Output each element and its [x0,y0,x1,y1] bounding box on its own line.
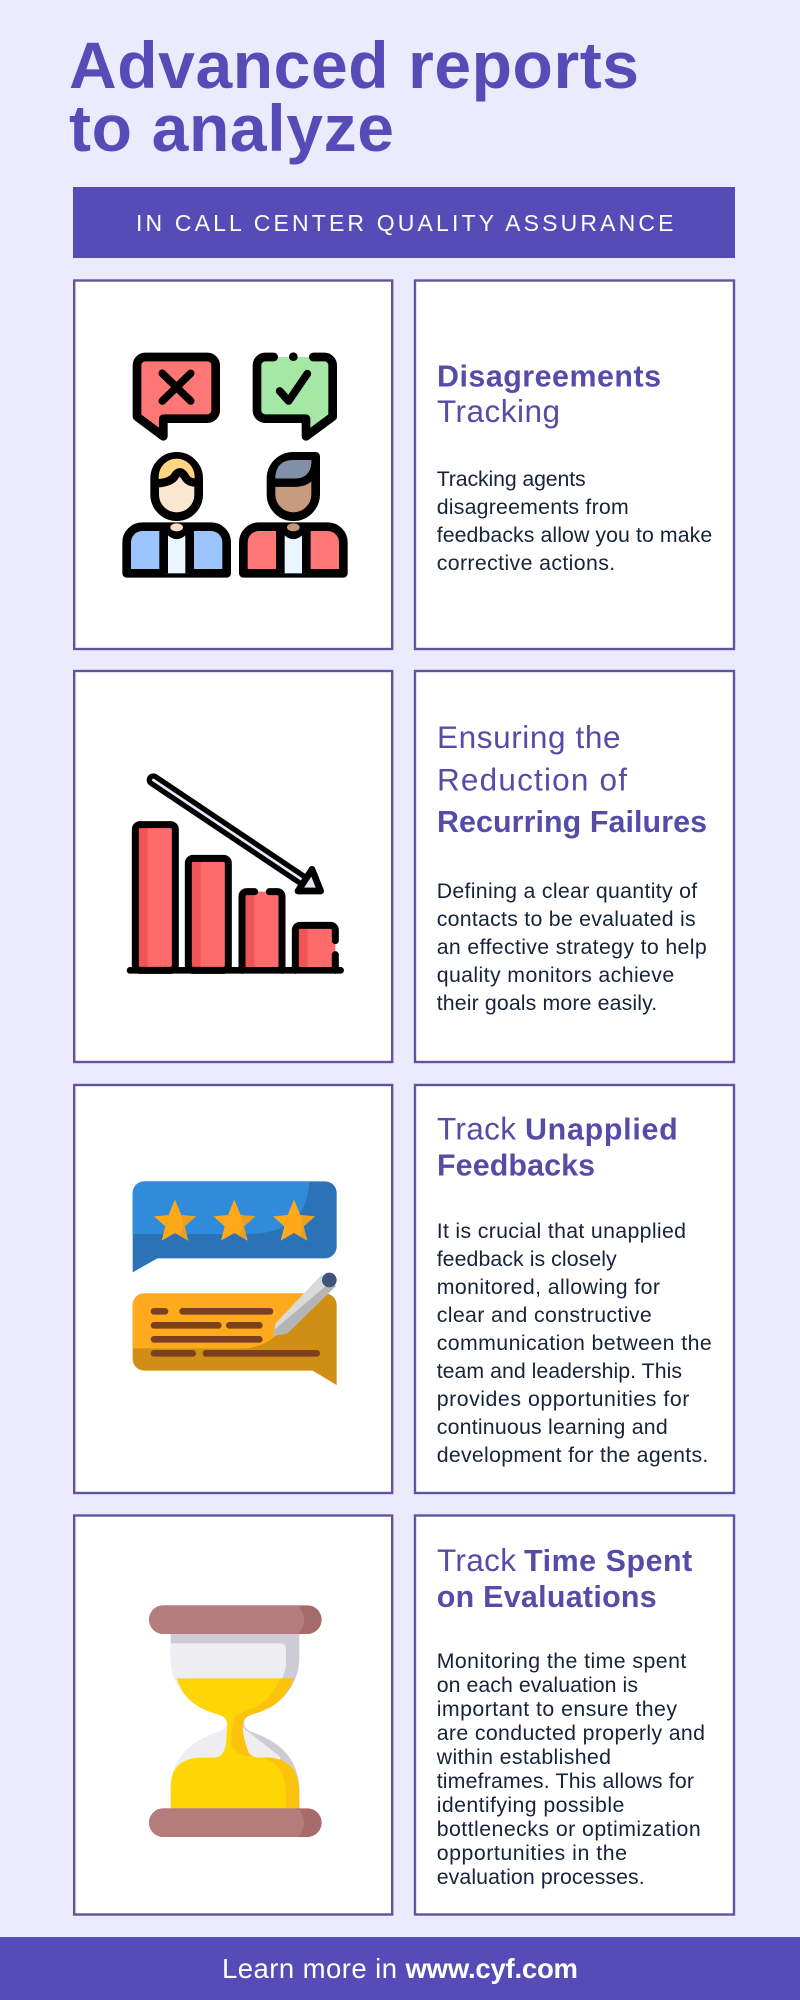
heading: Disagreements [437,360,661,394]
body text: feedback is closely [437,1247,617,1271]
panel: recurring failures text card [415,671,734,1062]
body text: feedbacks allow you to make [437,523,712,547]
body text: identifying possible [437,1793,624,1817]
body text: team and leadership. This [437,1359,682,1383]
heading: Ensuring the [437,719,620,755]
icon: hourglass [149,1605,322,1837]
body text: opportunities in the [437,1841,627,1865]
body text: quality monitors achieve [437,963,674,987]
body text: evaluation processes. [437,1865,645,1889]
footer bar [0,1937,800,2000]
body text: monitored, allowing for [437,1275,660,1299]
heading: Track [437,1542,516,1578]
footer bar: www.cyf.com [404,1953,578,1984]
body text: communication between the [437,1331,712,1355]
body text: bottlenecks or optimization [437,1817,701,1841]
body text: development for the agents. [437,1443,708,1467]
body text: an effective strategy to help [437,935,707,959]
heading: Reduction of [437,762,627,798]
body text: Monitoring the time spent [437,1649,686,1673]
body text: continuous learning and [437,1415,668,1439]
body text: are conducted properly and [437,1721,705,1745]
heading [437,1542,692,1614]
body text: important to ensure they [437,1697,677,1721]
title: to analyze [69,91,394,165]
panel: time spent text card [415,1516,734,1914]
right person [243,456,343,573]
body text: on each evaluation is [437,1673,638,1697]
body text: provides opportunities for [437,1387,689,1411]
footer bar: Learn more in [222,1953,397,1984]
panel: disagreements icon card [74,280,392,649]
subtitle banner [73,187,735,258]
body text: It is crucial that unapplied [437,1219,686,1243]
body text: Defining a clear quantity of [437,879,697,903]
heading: Track [437,1110,516,1146]
body text: their goals more easily. [437,991,657,1015]
heading: Recurring Failures [437,805,707,839]
panel: unapplied feedbacks icon card [74,1085,392,1493]
icon: two agents disagreeing [127,352,343,573]
body text [437,467,712,575]
heading [437,1110,678,1182]
heading: Unapplied [525,1112,678,1146]
heading [437,360,661,429]
heading: Time Spent [524,1544,692,1578]
body text: corrective actions. [437,551,615,575]
body text [436,1649,705,1889]
panel: disagreements text card [415,280,734,649]
heading: Feedbacks [437,1148,595,1182]
body text [437,879,707,1015]
left person [127,456,227,573]
body text: contacts to be evaluated is [437,907,696,931]
body text: disagreements from [437,495,629,519]
icon: star rating and written feedback bubbles [133,1181,337,1385]
body text: Tracking agents [437,467,586,491]
subtitle banner: IN CALL CENTER QUALITY ASSURANCE [136,210,674,236]
panel: time spent icon card [74,1516,392,1914]
panel: unapplied feedbacks text card [415,1085,734,1493]
icon: declining bar chart with arrow [130,780,341,970]
title [69,28,639,165]
panel: recurring failures icon card [74,671,392,1062]
heading: on Evaluations [437,1580,657,1614]
body text: clear and constructive [437,1303,652,1327]
heading: Tracking [437,393,560,429]
title: Advanced reports [69,28,639,102]
heading [437,719,707,839]
body text: within established [436,1745,611,1769]
body text [437,1219,712,1467]
body text: timeframes. This allows for [437,1769,694,1793]
